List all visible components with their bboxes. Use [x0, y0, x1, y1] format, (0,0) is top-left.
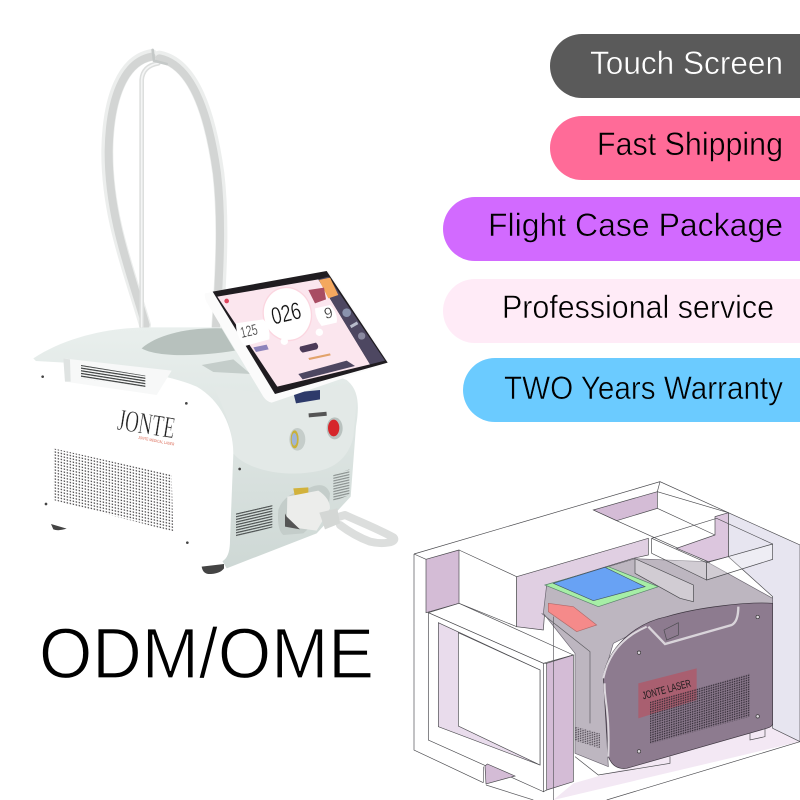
- pill: Professional service: Professional service: [502, 289, 774, 325]
- case back wall: [517, 538, 648, 630]
- readout 9: 9: [322, 304, 335, 323]
- machine mesh vent: [650, 673, 750, 744]
- main dial reading 026: 026: [269, 297, 304, 331]
- pill: Touch Screen: Touch Screen: [590, 45, 783, 81]
- pill: TWO Years Warranty: [463, 358, 800, 422]
- machine tray recesses: [142, 328, 251, 374]
- readout 125: 125: [239, 321, 259, 342]
- dark red mode tile: [308, 288, 326, 303]
- foam lid inner panel: [438, 623, 540, 765]
- foam right notch: [677, 513, 728, 562]
- case floor: [553, 727, 800, 800]
- handpiece holder: [278, 485, 330, 535]
- screws: [41, 375, 241, 544]
- small screen controls: [224, 299, 331, 360]
- icon: hanging cable and hook: [107, 50, 221, 327]
- red parts: [548, 603, 597, 632]
- panel: feature pills: [443, 34, 800, 422]
- handpiece cable: [328, 515, 394, 543]
- pill: Professional service: [443, 279, 800, 343]
- pill: Flight Case Package: [443, 197, 800, 261]
- machine panel: [603, 603, 773, 769]
- foam left block: [426, 550, 459, 613]
- foam lid frame: [428, 613, 543, 792]
- red logo label: JONTE LASER: [641, 678, 693, 702]
- machine top in grey: [543, 559, 773, 767]
- foam lid opening: [458, 633, 540, 765]
- machine lower vent: [575, 727, 600, 748]
- panel: laser machine: [26, 271, 394, 574]
- play button: [300, 343, 318, 353]
- pill: Fast Shipping: [550, 116, 800, 180]
- button: yellow dial: [289, 428, 305, 451]
- heading: ODM/OME: ODM/OME: [39, 615, 374, 694]
- machine feet blocks: [575, 728, 765, 775]
- pill: Flight Case Package: Flight Case Package: [488, 207, 783, 243]
- top vent: [63, 358, 172, 395]
- case outer outline: [414, 482, 800, 800]
- logo: JONTE: JONTE: [116, 403, 178, 445]
- foam lid top: [428, 603, 573, 663]
- readout 9: [315, 304, 337, 326]
- logo: JONTE: JONTE MEDICAL LASER: [138, 435, 175, 447]
- corner foam outlines: [635, 518, 773, 602]
- foam top block: [593, 492, 657, 521]
- small label: [309, 412, 327, 417]
- pill: TWO Years Warranty: TWO Years Warranty: [504, 370, 783, 406]
- feet: [51, 524, 224, 574]
- machine screws: [637, 615, 759, 753]
- machine handle: [648, 607, 738, 644]
- machine white front: [26, 361, 233, 565]
- logo: JONTE: [116, 403, 178, 447]
- machine side shell: [33, 327, 358, 568]
- front dot grid vent: [53, 448, 173, 532]
- side vents: [236, 469, 349, 537]
- machine control panel: [213, 383, 357, 474]
- blue screen: [553, 567, 645, 601]
- machine front curve: [603, 627, 647, 757]
- pill: Fast Shipping: Fast Shipping: [597, 126, 783, 162]
- pill: Touch Screen: [550, 34, 800, 98]
- display slot: [293, 390, 320, 403]
- screen navigation strip: [318, 277, 385, 364]
- handpiece: [285, 487, 340, 531]
- touch screen tablet: [205, 271, 389, 403]
- panel: flight case cutaway drawing: [414, 482, 800, 800]
- button: red emergency stop: [327, 417, 343, 439]
- lower guide lines: [483, 613, 590, 800]
- red logo label: [638, 668, 697, 718]
- bottom screen bar: [298, 361, 355, 379]
- green screen frame: [545, 567, 658, 607]
- case right wall: [728, 513, 800, 742]
- foam pillar: [547, 655, 573, 790]
- main dial reading 026: [258, 283, 316, 345]
- bottom foam tab: [485, 764, 515, 784]
